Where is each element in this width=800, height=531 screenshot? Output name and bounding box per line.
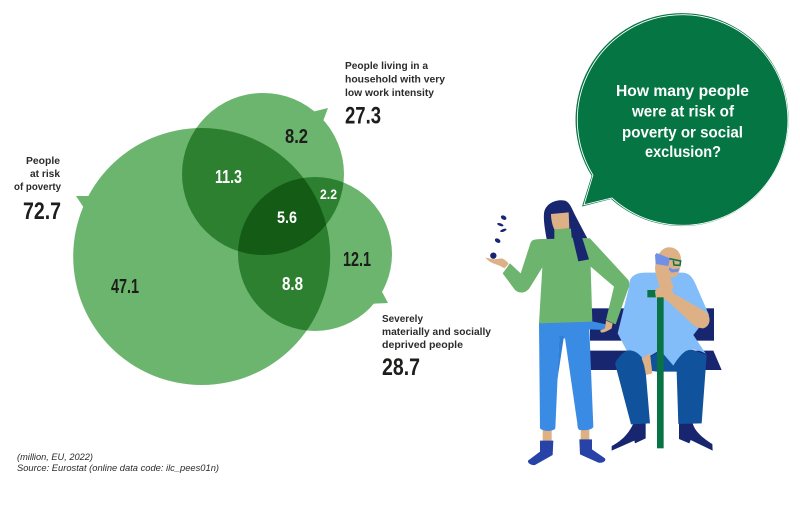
value: work intensity only: 8.2 (285, 126, 308, 148)
cane (657, 297, 664, 448)
value: poverty and work intensity: 11.3 (215, 166, 242, 187)
woman ankles (543, 428, 589, 442)
label: very low work intensity (345, 60, 445, 130)
woman shoes (528, 439, 605, 465)
source note: (million, EU, 2022) (17, 452, 93, 462)
question text: were at risk of (631, 104, 735, 121)
man shoes (612, 423, 713, 451)
ball and coins (490, 214, 507, 259)
woman hair back (544, 200, 587, 239)
source note: Source: Eurostat (online data code: ilc_pees01n) (17, 463, 219, 473)
circle: very low work intensity (182, 93, 344, 255)
label: severely materially and socially deprived (382, 313, 491, 381)
label: very low work intensity: 27.3 (345, 102, 381, 130)
label: at risk of poverty: 72.7 (23, 198, 61, 225)
woman hand on hip (600, 321, 613, 333)
woman trousers (539, 321, 606, 431)
label: very low work intensity: People living in a (345, 60, 428, 72)
illustration: woman and man on bench (485, 200, 722, 465)
man trousers (615, 350, 707, 424)
question text: poverty or social (622, 124, 743, 141)
question text: exclusion? (645, 144, 721, 161)
value: poverty and deprived: 8.8 (282, 273, 303, 294)
label: at risk of poverty (14, 155, 61, 225)
circle: at risk of poverty (73, 128, 330, 385)
label: at risk of poverty: People (26, 155, 60, 167)
label: severely materially and socially deprived: Severely (382, 313, 423, 325)
label: at risk of poverty: at risk (30, 168, 60, 180)
cane handle (647, 290, 672, 297)
woman open hand (485, 257, 509, 268)
man hand on lap (642, 353, 652, 375)
venn diagram (73, 93, 392, 385)
man (612, 247, 713, 451)
value: all three: 5.6 (277, 208, 297, 227)
woman face (551, 212, 569, 229)
source note (17, 452, 219, 473)
woman torso and arms (503, 229, 629, 324)
man moustache (669, 267, 679, 273)
man arm (655, 286, 710, 328)
man head (655, 247, 681, 288)
question text: How many people (616, 83, 749, 100)
man glasses frame (669, 259, 681, 265)
woman (485, 200, 629, 465)
question text (616, 83, 749, 161)
label: severely materially and socially deprived: materially and socially (382, 326, 491, 338)
value: deprived only: 12.1 (343, 249, 371, 271)
label: at risk of poverty: of poverty (14, 181, 61, 193)
label: severely materially and socially deprived: deprived people (382, 339, 463, 351)
circle: severely materially and socially deprived (238, 177, 392, 331)
speech bubble (576, 13, 789, 226)
bench (590, 308, 722, 370)
woman hair strand (569, 210, 589, 261)
label: very low work intensity: low work intensity (345, 87, 434, 99)
label: severely materially and socially deprived: 28.7 (382, 354, 420, 381)
man glasses (655, 253, 670, 266)
label: very low work intensity: household with very (345, 74, 445, 86)
value: poverty only: 47.1 (111, 276, 139, 298)
value: work intensity and deprived: 2.2 (320, 186, 337, 202)
trouser fold (557, 336, 564, 380)
man shirt (618, 273, 709, 366)
